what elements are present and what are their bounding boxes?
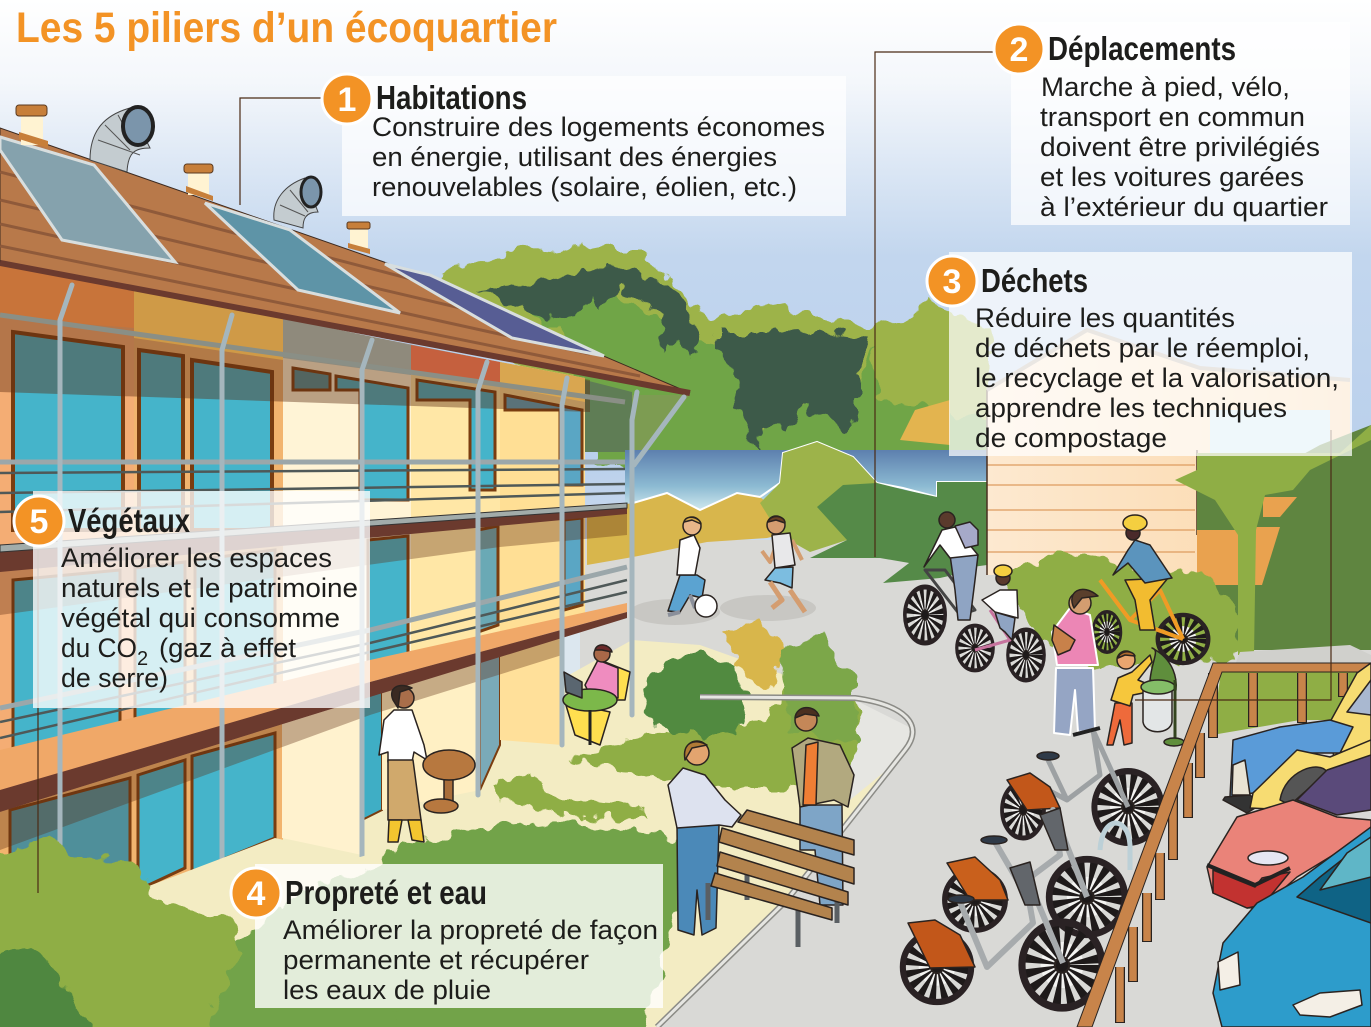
body 5: de serre) (61, 663, 168, 693)
body 5: Améliorer les espaces (61, 543, 332, 573)
wooden house (987, 330, 1350, 575)
body 2: et les voitures garées (1040, 162, 1304, 192)
badge 4 (231, 868, 281, 918)
boy kicking ball (668, 517, 717, 617)
balcony rails (0, 462, 627, 738)
first-floor deck (0, 508, 627, 572)
cyclist in white (905, 512, 978, 643)
facade walls (0, 263, 134, 900)
body 4: permanente et récupérer (283, 945, 589, 975)
coloured facade bands (0, 263, 134, 328)
roof shadow on facade (0, 263, 590, 412)
lawn behind fence (1212, 665, 1371, 735)
bottom-left shrubs (0, 837, 400, 1027)
chimney 1 (16, 105, 48, 148)
trees on the right (1175, 425, 1371, 655)
solar panel 2 (205, 203, 400, 313)
body 2: transport en commun (1040, 102, 1305, 132)
badge 1 (322, 74, 372, 124)
body 3: Réduire les quantités (975, 303, 1235, 333)
body 1: renouvelables (solaire, éolien, etc.) (372, 172, 797, 202)
body 5: végétal qui consomme (61, 603, 340, 633)
heading 5: Végétaux (68, 502, 191, 539)
title: Les 5 piliers d’un écoquartier (16, 4, 557, 52)
panel 1: Habitations (322, 74, 846, 216)
badge 5: 5 (30, 503, 48, 541)
leader lines (38, 52, 1331, 893)
round table (423, 750, 475, 813)
body 1: en énergie, utilisant des énergies (372, 142, 777, 172)
body 2 (1040, 72, 1328, 222)
panel 5: Végétaux (14, 491, 370, 708)
panel 3: Déchets (927, 252, 1352, 456)
bushes beside the lake (760, 442, 987, 583)
gray patch by hedge (1235, 645, 1371, 665)
middle-floor windows (13, 518, 582, 760)
solar panel 3 (385, 264, 604, 356)
vent pipe 1 (90, 107, 153, 172)
lake (625, 450, 990, 510)
muted trees seen behind building end (585, 380, 690, 452)
roof (0, 128, 690, 393)
solar panel 1 (0, 137, 175, 262)
cyclist with yellow helmet (1093, 515, 1208, 663)
car: pink sedan (1207, 755, 1371, 908)
body 3 (975, 303, 1339, 453)
child cyclist (957, 565, 1044, 680)
body 3: de compostage (975, 423, 1167, 453)
body 2: doivent être privilégiés (1040, 132, 1320, 162)
rental bike 3 (903, 862, 1102, 1008)
rental bike 1 (1002, 728, 1162, 843)
wooden fence (1077, 663, 1371, 1027)
trees behind the lake (440, 243, 990, 465)
body 2: à l’extérieur du quartier (1040, 192, 1328, 222)
man leaning on bench (668, 741, 741, 935)
body 3: de déchets par le réemploi, (975, 333, 1310, 363)
badge 4: 4 (247, 875, 266, 913)
panel 4: Propreté et eau (231, 864, 663, 1008)
gray fascia beam (0, 315, 625, 402)
body 1 (372, 112, 825, 202)
panel 2: Déplacements (994, 22, 1350, 225)
second-floor deck and beam (0, 603, 627, 790)
heading 1: Habitations (376, 79, 527, 116)
badge 2 (994, 24, 1044, 74)
curved kerb (657, 697, 913, 1027)
orange foliage (900, 400, 950, 445)
top-floor windows (13, 332, 582, 530)
heading 4: Propreté et eau (285, 874, 487, 911)
shadow under upper deck (0, 510, 627, 615)
cream floor at building foot (120, 838, 385, 960)
body 5: (gaz à effet (159, 633, 297, 663)
ground and paths (580, 442, 1371, 1027)
chimney 3 (347, 222, 370, 254)
player shadows (630, 595, 816, 625)
body 5: du CO (61, 633, 137, 663)
bike rack (1100, 823, 1130, 870)
body 4: Améliorer la propreté de façon (283, 915, 658, 945)
body 3: apprendre les techniques (975, 393, 1287, 423)
building (0, 105, 690, 940)
man with jacket (792, 708, 854, 905)
body 1: Construire des logements économes (372, 112, 825, 142)
boy running (762, 516, 805, 612)
rental bike 2 (945, 808, 1125, 935)
woman with laptop (563, 645, 630, 745)
badge 5 (14, 496, 64, 546)
boy at recycling bin (1107, 651, 1152, 745)
woman standing (379, 686, 427, 842)
vent pipe 2 (274, 177, 321, 228)
car: yellow and blue 2CV (1223, 663, 1371, 813)
car: blue hatchback (1213, 827, 1371, 1027)
lawn and shrubs in the garden (320, 618, 860, 1027)
hedge behind cyclists (1000, 555, 1240, 668)
body 5: 2 (137, 648, 148, 670)
body 4 (283, 915, 658, 1005)
wooden bench (708, 810, 854, 947)
badge 3: 3 (943, 263, 961, 301)
body 4: les eaux de pluie (283, 975, 491, 1005)
body 2: Marche à pied, vélo, (1041, 72, 1290, 102)
heading 2: Déplacements (1048, 30, 1236, 67)
badge 3 (927, 256, 977, 306)
heading 3: Déchets (981, 262, 1088, 299)
recycling bin (1141, 648, 1184, 746)
body 3: le recyclage et la valorisation, (975, 363, 1339, 393)
garden terrace (275, 640, 905, 1027)
badge 2: 2 (1010, 31, 1028, 69)
woman with bag (1052, 589, 1098, 735)
pale path inside kerb (845, 700, 915, 800)
vertical poles (60, 285, 684, 935)
badge 1: 1 (338, 81, 356, 119)
body 5: naturels et le patrimoine (61, 573, 358, 603)
body 5 (61, 543, 358, 693)
ground-floor openings and alcoves (0, 632, 562, 940)
chimney 2 (184, 164, 213, 201)
